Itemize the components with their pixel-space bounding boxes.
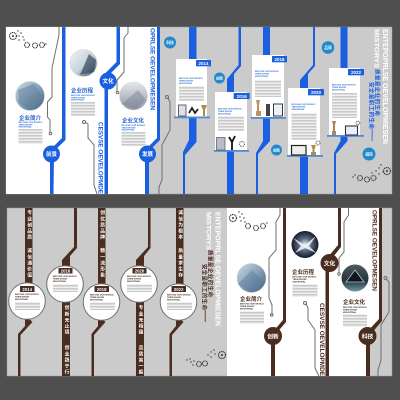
badge: 诚信	[362, 148, 376, 160]
text block: 企业文化: INDUSTRIAL	[122, 129, 135, 132]
brown trunk lines	[271, 208, 382, 376]
badge: 创新	[264, 327, 282, 345]
badge: 科技: 科技	[362, 332, 373, 340]
card: 2022: INDUSTRIAL	[332, 89, 346, 92]
badge: 创新: 创新	[216, 76, 223, 80]
panel: top wall	[6, 27, 392, 195]
heading: ENTEPOPRLSE: ENTEPOPRLSE OEVELOPMIESEN	[381, 29, 388, 144]
card: 2016	[214, 92, 250, 152]
badge: 创新 lower: 创新	[273, 148, 280, 152]
slogan: 安全是职工的生命: 安全是职工的生命	[200, 264, 208, 311]
text block: 企业历程: INDUSTRIAL	[292, 280, 306, 283]
card: 2020: 2020	[311, 90, 322, 95]
vertical text: OPRLSE: OPRLSE OEVELOPMESEN	[148, 28, 156, 110]
bar text: 创新无止境 创业践于行: 创新无止境	[64, 304, 69, 335]
round card: 2016: TEEM WHOM	[53, 278, 67, 280]
bar text: 创优质品牌 精一流形象	[99, 209, 105, 278]
heading: MISTORYS: MISTORYS	[204, 212, 212, 251]
round card: 2016: INDUSTRIAL	[53, 280, 67, 283]
slogan rule	[371, 129, 374, 141]
badge: 文化: 文化	[324, 259, 335, 267]
text block: 企业文化	[343, 298, 367, 327]
badge: 文化	[100, 72, 116, 90]
card: 2020: INDUSTRIAL	[292, 108, 305, 111]
text block: 企业简介: 企业简介	[19, 114, 41, 122]
photo: 企业文化	[342, 264, 368, 292]
text block: 企业文化: BEYOND OUR WORLD	[122, 125, 146, 127]
round card: 2014: BEYOND OUR WORLD	[15, 294, 39, 296]
text block: 企业简介	[240, 295, 264, 324]
bar text: 诚信为根本 质量求生存: 质量求生存	[177, 247, 183, 278]
slogan: 安全是职工的生命: 安全是职工的生命	[368, 82, 376, 129]
round card: 2020	[121, 266, 157, 302]
text block: 企业简介: INDUSTRIAL	[18, 126, 32, 129]
text block: 企业简介	[18, 114, 43, 144]
round card: 2022: 2022	[174, 287, 184, 292]
blue timeline lines, gray zone	[183, 27, 348, 194]
gears: top left	[10, 30, 47, 48]
blue trunk lines, white zone	[50, 27, 160, 194]
photo: 企业历程	[292, 231, 318, 258]
round card: 2018: TEEM WHOM	[90, 297, 104, 299]
panel: bottom white wall	[227, 208, 389, 377]
gears: bottom white top left	[230, 211, 268, 230]
bar text: 专业创品质 诚信通价值	[26, 209, 32, 278]
card: 2018	[251, 55, 287, 119]
round card: 2016: BEYOND OUR WORLD	[53, 276, 77, 278]
bar text: 专业创品质 诚信通价值: 专业创品质	[26, 209, 32, 240]
round card: 2014: INDUSTRIAL	[15, 298, 29, 301]
bar text: 诚信为根本 质量求生存: 诚信为根本	[177, 209, 183, 240]
gears: top right	[352, 164, 390, 182]
card: 2022	[327, 68, 364, 137]
badge: 创新: 创新	[267, 332, 279, 340]
round card: 2020: INDUSTRIAL	[127, 280, 141, 283]
card: 2022: BEYOND OUR WORLD	[332, 84, 356, 86]
card: 2014: BEYOND OUR WORLD	[179, 78, 203, 80]
photo: 企业简介	[237, 264, 266, 292]
card: 2018: BEYOND OUR WORLD	[255, 71, 279, 73]
card: 2016: 2016	[237, 94, 247, 99]
card: 2020: TEEM WHOM	[292, 107, 306, 109]
badge: 科技: 科技	[166, 40, 174, 45]
bar text: 创新无止境 创业践于行	[64, 304, 69, 375]
vertical text: CESVSE: CESVSE OEVELOPMDE	[96, 122, 104, 195]
round card: 2014	[9, 283, 45, 319]
bar text: 专业无相疆 品质旨一般: 专业无相疆	[138, 304, 143, 335]
card: 2014	[174, 59, 211, 118]
badge: 科技	[164, 36, 176, 48]
text block: 企业历程: 企业历程	[292, 268, 314, 276]
round card: 2018: INDUSTRIAL	[90, 298, 104, 301]
text block: 企业简介: BEYOND OUR WORLD	[240, 304, 264, 306]
round card: 2014: 2014	[22, 287, 33, 292]
round card: 2014: TEEM WHOM	[15, 296, 29, 298]
text block: 企业历程: TEEM WHOM	[71, 97, 85, 99]
text block: 企业历程: BEYOND OUR WORLD	[292, 276, 317, 278]
card: 2014: INDUSTRIAL	[179, 82, 193, 85]
badge: 科技	[358, 327, 376, 345]
text block: 企业文化: INDUSTRIAL	[343, 311, 357, 314]
text block: 企业文化: 企业文化	[122, 116, 144, 124]
text block: 企业文化: 企业文化	[343, 298, 365, 306]
round card: 2022: TEEM WHOM	[167, 297, 181, 299]
badge: 品质: 品质	[324, 45, 332, 50]
card: 2018: 2018	[274, 57, 285, 62]
round card: 2018: 2018	[97, 287, 107, 292]
photo: 企业历程	[70, 50, 97, 76]
text block: 企业简介: TEEM WHOM	[240, 306, 254, 308]
card: 2016: TEEM WHOM	[218, 111, 232, 113]
text block: 企业简介: BEYOND OUR WORLD	[18, 122, 43, 124]
card: 2018: TEEM WHOM	[255, 74, 269, 76]
text block: 企业简介: INDUSTRIAL	[240, 307, 254, 310]
text block: 企业文化	[122, 116, 146, 146]
round card: 2016	[47, 266, 83, 302]
text block: 企业历程	[292, 268, 318, 297]
text block: 企业历程	[71, 86, 95, 116]
gears: bottom center	[186, 349, 226, 366]
round card: 2022: INDUSTRIAL	[167, 298, 181, 301]
round card: 2020: BEYOND OUR WORLD	[127, 276, 151, 278]
round card: 2022: BEYOND OUR WORLD	[167, 294, 191, 296]
card: 2018: INDUSTRIAL	[255, 75, 269, 78]
slogan: 质量是企业的生命: 质量是企业的生命	[374, 69, 382, 116]
brown timeline lines	[18, 208, 184, 376]
round card: 2016: 2016	[61, 268, 71, 274]
card: 2016: INDUSTRIAL	[218, 113, 232, 116]
bar text: 创优质品牌 精一流形象: 精一流形象	[99, 247, 105, 278]
slogan: 质量是企业的生命: 质量是企业的生命	[206, 250, 214, 298]
badge: 创新	[214, 72, 225, 84]
round card: 2022	[160, 284, 197, 320]
card: 2016: BEYOND OUR WORLD	[218, 108, 242, 110]
bar text: 诚信为根本 质量求生存	[177, 209, 183, 278]
slogan rule	[204, 310, 207, 322]
text block: 企业历程: BEYOND OUR WORLD	[71, 95, 95, 97]
badge: 文化: 文化	[102, 77, 114, 85]
round card: 2020: 2020	[135, 268, 145, 274]
card: 2020	[287, 88, 324, 157]
card: 2014: 2014	[198, 61, 209, 66]
photo: 企业文化	[120, 82, 148, 110]
vertical text: OPRLSE: OPRLSE OEVELOPMESEN	[370, 210, 377, 291]
badge: 发展: 发展	[142, 150, 153, 158]
text block: 企业历程: 企业历程	[71, 86, 93, 94]
photo: 企业简介	[16, 82, 44, 110]
bar text: 专业无相疆 品质旨一般	[138, 304, 143, 375]
badge: 文化	[320, 254, 338, 272]
bar text: 专业无相疆 品质旨一般: 品质旨一般	[138, 345, 143, 375]
round card: 2018: BEYOND OUR WORLD	[90, 294, 114, 296]
text block: 企业文化: TEEM WHOM	[343, 309, 357, 311]
heading: MISTORYS: MISTORYS	[372, 29, 380, 69]
circuit lines, white zone	[48, 27, 170, 194]
card: 2014: TEEM WHOM	[179, 81, 193, 83]
bar text: 专业创品质 诚信通价值: 诚信通价值	[26, 247, 32, 278]
text block: 企业文化: BEYOND OUR WORLD	[343, 307, 367, 309]
panel: bottom gray wall	[7, 208, 392, 376]
bar text: 创优质品牌 精一流形象: 创优质品牌	[99, 209, 105, 240]
round card: 2018	[83, 284, 120, 320]
text block: 企业简介: TEEM WHOM	[18, 124, 33, 126]
vertical text: CESVSE: CESVSE OEVELOPMDE	[318, 303, 325, 377]
text block: 企业简介: 企业简介	[240, 295, 262, 303]
bar text: 创新无止境 创业践于行: 创业践于行	[64, 344, 69, 375]
badge: 创新 lower	[271, 144, 282, 156]
badge: 诚信: 诚信	[365, 152, 373, 156]
card: 2022: 2022	[351, 70, 362, 75]
badge: 发展	[139, 146, 156, 162]
badge: 前景	[43, 146, 60, 162]
text block: 企业历程: INDUSTRIAL	[71, 99, 85, 102]
text block: 企业文化: TEEM WHOM	[122, 127, 136, 129]
badge: 前景: 前景	[46, 150, 57, 158]
card: 2022: TEEM WHOM	[332, 87, 346, 89]
badge: 品质	[322, 41, 334, 54]
text block: 企业历程: TEEM WHOM	[292, 279, 307, 281]
card: 2020: BEYOND OUR WORLD	[292, 104, 316, 106]
heading: ENTEPOPRLSE: ENTEPOPRLSE OEVELOPMIESEN	[214, 212, 220, 326]
round card: 2020: TEEM WHOM	[127, 278, 141, 280]
circuit lines	[269, 208, 389, 376]
